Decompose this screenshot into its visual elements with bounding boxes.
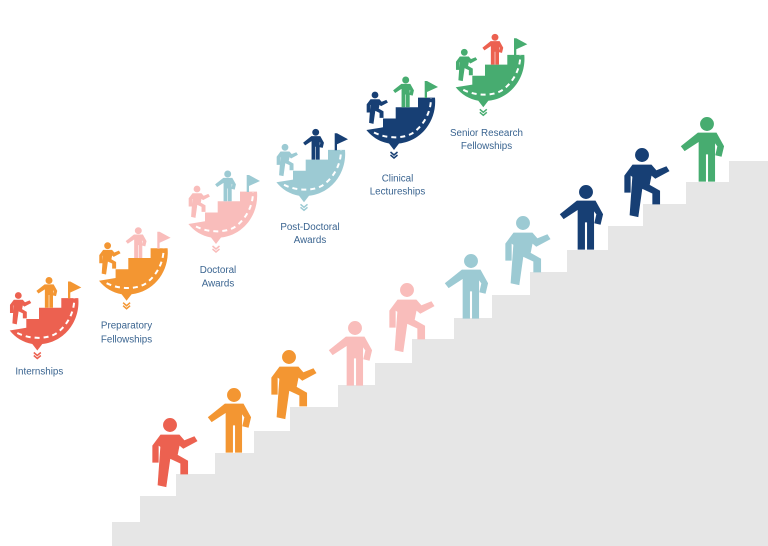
label: preparatory fellowships: Preparatory	[101, 320, 152, 332]
label: clinical lectureships: Lectureships	[370, 186, 425, 197]
icon: preparatory fellowships	[99, 228, 171, 309]
icon: clinical lectureships	[366, 77, 438, 158]
figure: pink standing	[329, 321, 372, 385]
staircase	[112, 161, 768, 546]
icon: post-doctoral awards	[276, 129, 348, 210]
label: senior research fellowships: Fellowships	[461, 141, 512, 152]
figure: navy climber	[625, 148, 669, 217]
label: preparatory fellowships: Fellowships	[101, 334, 152, 346]
figure: orange standing	[208, 388, 251, 452]
figure: pink climber	[390, 283, 434, 352]
label: clinical lectureships: Clinical	[382, 174, 413, 184]
figure: light blue standing	[445, 254, 488, 318]
figure: light blue climber	[506, 216, 550, 285]
label: internships: Internships	[15, 366, 63, 378]
figure: orange climber	[272, 350, 316, 419]
figure: navy standing	[560, 185, 603, 249]
label: post-doctoral awards: Awards	[294, 235, 326, 246]
figure: green standing	[681, 117, 724, 181]
icon: senior research fellowships	[456, 34, 527, 115]
figure: red climber	[153, 418, 197, 487]
icon: internships	[10, 277, 81, 358]
label: post-doctoral awards: Post-Doctoral	[280, 222, 340, 233]
label: doctoral awards: Awards	[202, 278, 234, 290]
icon: doctoral awards	[188, 171, 260, 252]
label: doctoral awards: Doctoral	[200, 265, 236, 276]
label: senior research fellowships: Senior Research	[450, 128, 523, 139]
